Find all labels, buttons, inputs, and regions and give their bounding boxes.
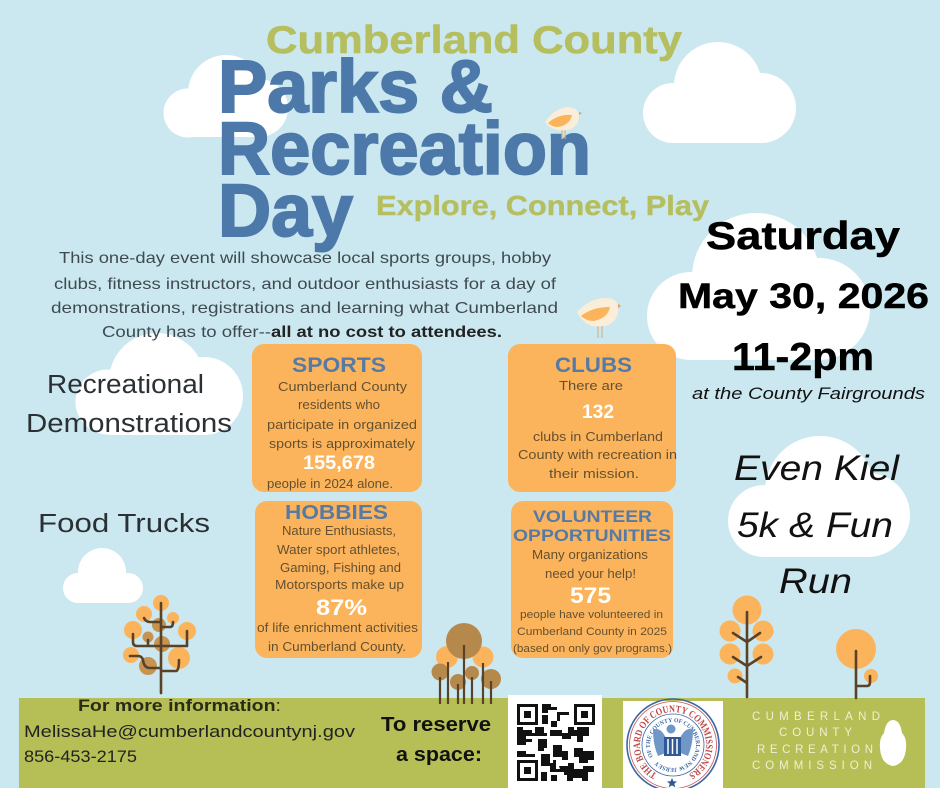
title: Parks & Recreation Day xyxy=(218,45,591,252)
panel: sports: SPORTS xyxy=(292,353,386,377)
side label: recreational demonstrations: Demonstrations xyxy=(26,410,232,438)
county seal: OF THE COUNTY OF CUMBERLAND NEW JERSEY xyxy=(646,718,700,772)
panel: clubs: clubs in Cumberland xyxy=(533,430,663,444)
commission logo: CUMBERLAND xyxy=(752,711,880,723)
title: Parks & Recreation Day: Recreation xyxy=(218,107,591,190)
panel: volunteer opportunities: VOLUNTEER xyxy=(533,507,652,526)
panel: hobbies: HOBBIES xyxy=(285,502,388,524)
QR code xyxy=(508,695,602,788)
commission logo: COMMISSION xyxy=(752,760,872,772)
panel: clubs: There are xyxy=(559,379,623,393)
fun run xyxy=(734,449,900,601)
contact information: For more information : xyxy=(78,696,281,715)
panel: clubs: County with recreation in xyxy=(518,448,677,462)
description paragraph xyxy=(51,250,558,341)
panel: volunteer opportunities: people have volunteered in xyxy=(520,609,663,621)
side label: recreational demonstrations xyxy=(26,371,232,438)
reserve label: a space: xyxy=(396,744,482,766)
cloud: behind 5k xyxy=(728,436,910,557)
panel: sports: Cumberland County xyxy=(278,380,408,394)
panel: volunteer opportunities: Cumberland County in 2025 xyxy=(517,626,667,638)
icon: bird above clubs xyxy=(577,298,621,338)
tagline: Explore, Connect, Play xyxy=(376,190,709,221)
cloud: lower left xyxy=(63,548,143,603)
icon: white tree blob xyxy=(880,720,906,766)
contact information: 856-453-2175 xyxy=(24,747,137,766)
cloud: behind demonstrations xyxy=(76,333,243,435)
panel: volunteer opportunities: OPPORTUNITIES xyxy=(513,526,671,545)
contact information: MelissaHe@cumberlandcountynj.gov xyxy=(24,722,356,741)
panel: volunteer opportunities xyxy=(511,501,673,658)
cloud: top right xyxy=(643,42,796,143)
panel: volunteer opportunities: need your help! xyxy=(545,567,636,581)
fun run: Even Kiel xyxy=(734,449,900,488)
cloud: behind date xyxy=(647,213,870,360)
panel: hobbies: of life enrichment activities xyxy=(257,621,418,635)
panel: sports: people in 2024 alone. xyxy=(267,477,393,491)
panel: sports: residents who xyxy=(298,398,380,412)
description paragraph: demonstrations, registrations and learning what Cumberland xyxy=(51,300,558,317)
description paragraph: clubs, fitness instructors, and outdoor enthusiasts for a day of xyxy=(54,276,557,293)
reserve label xyxy=(381,714,491,766)
clouds xyxy=(63,42,910,603)
description paragraph: all at no cost to attendees. xyxy=(271,324,502,341)
panel: volunteer opportunities: (based on only gov programs.) xyxy=(513,643,672,655)
date and time: 11-2pm xyxy=(732,336,874,379)
commission logo xyxy=(752,711,906,772)
panel: clubs: 132 xyxy=(582,401,614,423)
panel: hobbies: Gaming, Fishing and xyxy=(280,561,401,575)
panel: volunteer opportunities: Many organizations xyxy=(532,548,648,562)
date and time: May 30, 2026 xyxy=(678,277,929,316)
panel: sports: participate in organized xyxy=(267,418,417,432)
date and time xyxy=(678,215,929,379)
panel: volunteer opportunities: 575 xyxy=(570,583,611,608)
contact information xyxy=(24,696,356,766)
tree: right tall xyxy=(720,596,774,697)
panel: clubs: CLUBS xyxy=(555,353,632,377)
commission logo: COUNTY xyxy=(779,727,852,739)
side label: food trucks: Food Trucks xyxy=(38,510,210,538)
title: Cumberland County: Cumberland County xyxy=(266,19,682,62)
icon: bird on title xyxy=(545,107,582,139)
location: at the County Fairgrounds xyxy=(692,384,926,403)
cloud: behind title xyxy=(164,55,288,138)
tree: left branching xyxy=(123,595,196,693)
panel: hobbies: Motorsports make up xyxy=(275,578,404,592)
reserve label: To reserve xyxy=(381,714,491,736)
fun run: 5k & Fun xyxy=(737,506,893,545)
fun run: Run xyxy=(779,562,852,601)
date and time: Saturday xyxy=(706,215,900,258)
commission logo: RECREATION xyxy=(757,744,873,756)
panel: hobbies xyxy=(255,501,422,658)
description paragraph: County has to offer-- xyxy=(102,324,271,341)
footer band xyxy=(19,698,925,788)
panel: sports: 155,678 xyxy=(303,452,375,474)
side label: recreational demonstrations: Recreational xyxy=(47,371,204,399)
panel: clubs: their mission. xyxy=(549,467,639,481)
panel: clubs xyxy=(508,344,677,492)
panel: sports: sports is approximately xyxy=(269,437,416,451)
panel: sports xyxy=(252,344,422,492)
panel: hobbies: Nature Enthusiasts, xyxy=(282,524,396,538)
panel: hobbies: in Cumberland County. xyxy=(268,640,406,654)
title: Parks & Recreation Day: Day xyxy=(218,169,353,252)
tree: right small xyxy=(836,629,878,698)
county seal: THE BOARD OF COUNTY COMMISSIONERS xyxy=(633,705,713,780)
description paragraph: This one-day event will showcase local sports groups, hobby xyxy=(59,250,551,267)
panel: hobbies: Water sport athletes, xyxy=(277,543,400,557)
title: Parks & Recreation Day: Parks & xyxy=(218,45,493,128)
tree: center cluster xyxy=(432,623,501,704)
panel: hobbies: 87% xyxy=(316,595,367,620)
